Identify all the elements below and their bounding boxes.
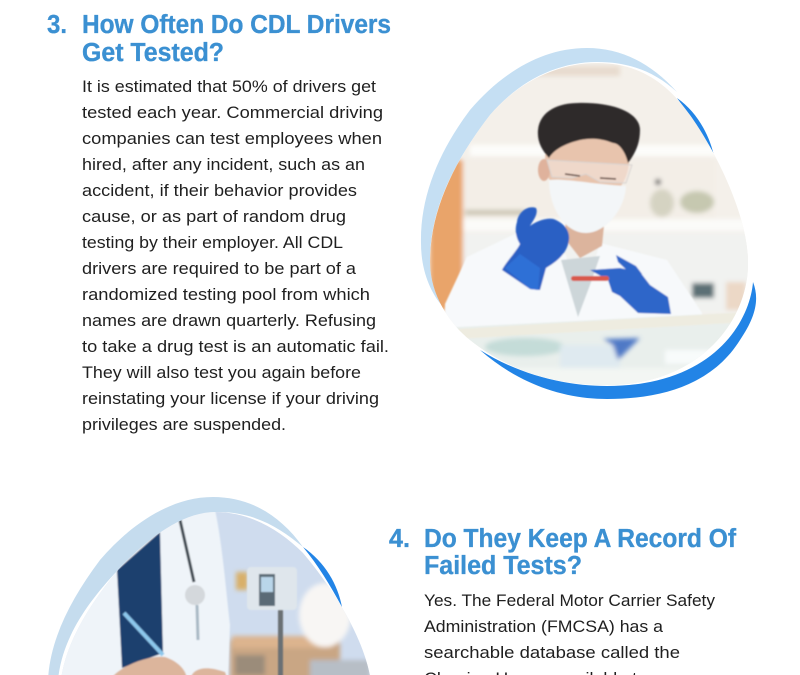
section 3 body text: names are drawn quarterly. Refusing [82, 311, 376, 330]
pen [124, 613, 163, 655]
section 3 body text: to take a drug test is an automatic fail. [82, 337, 389, 356]
section 3 body text: hired, after any incident, such as an [82, 155, 365, 174]
counter [457, 314, 736, 366]
neck and face [564, 224, 604, 258]
hair [538, 103, 640, 163]
section 3 heading: Get Tested? [82, 39, 224, 67]
section 3 body text: companies can test employees when [82, 129, 382, 148]
section 3 body text [82, 77, 389, 434]
section 4 crescent: light blue [48, 497, 303, 675]
section 3 body text: drivers are required to be part of a [82, 259, 357, 278]
right glove [590, 255, 671, 314]
crescent: light blue top left [421, 48, 677, 307]
section 4 heading [389, 525, 736, 580]
petri dish [571, 276, 609, 281]
mask [549, 180, 626, 233]
section 3 body text: They will also test you again before [82, 363, 361, 382]
section 4 heading: 4. [389, 525, 410, 553]
section 4 body text: Administration (FMCSA) has a [424, 617, 664, 636]
section 3 body text: tested each year. Commercial driving [82, 103, 383, 122]
coat [60, 505, 230, 675]
machine [247, 567, 297, 610]
section 3 heading: 3. [47, 11, 67, 39]
cuff shading [505, 254, 540, 290]
section 4 heading: Failed Tests? [424, 552, 582, 580]
section 3 heading [47, 11, 391, 67]
section 4 body text [424, 591, 716, 675]
coat [445, 233, 702, 335]
section 4 crescent: bright blue [303, 547, 342, 607]
photo: lab technician [430, 63, 748, 385]
section 4 body text: Yes. The Federal Motor Carrier Safety [424, 591, 716, 610]
section 3 body text: testing by their employer. All CDL [82, 233, 343, 252]
section 3 body text: It is estimated that 50% of drivers get [82, 77, 376, 96]
section 3 body text: accident, if their behavior provides [82, 181, 357, 200]
section 3 body text: reinstating your license if your driving [82, 389, 379, 408]
photo: doctor writing [62, 512, 370, 675]
section 4 heading: Do They Keep A Record Of [424, 525, 736, 553]
section 3 body text: privileges are suspended. [82, 415, 286, 434]
goggles [547, 160, 632, 183]
stethoscope [180, 520, 194, 582]
hand [110, 657, 187, 675]
section 3 body text: cause, or as part of random drug [82, 207, 346, 226]
navy shirt [117, 532, 163, 668]
section 4 body text: searchable database called the [424, 643, 680, 662]
section 3 body text: randomized testing pool from which [82, 285, 370, 304]
left glove [502, 207, 569, 290]
crescent: bright blue upper right [677, 98, 715, 160]
section 3 heading: How Often Do CDL Drivers [82, 11, 391, 39]
crescent: bright blue bottom [480, 282, 756, 399]
